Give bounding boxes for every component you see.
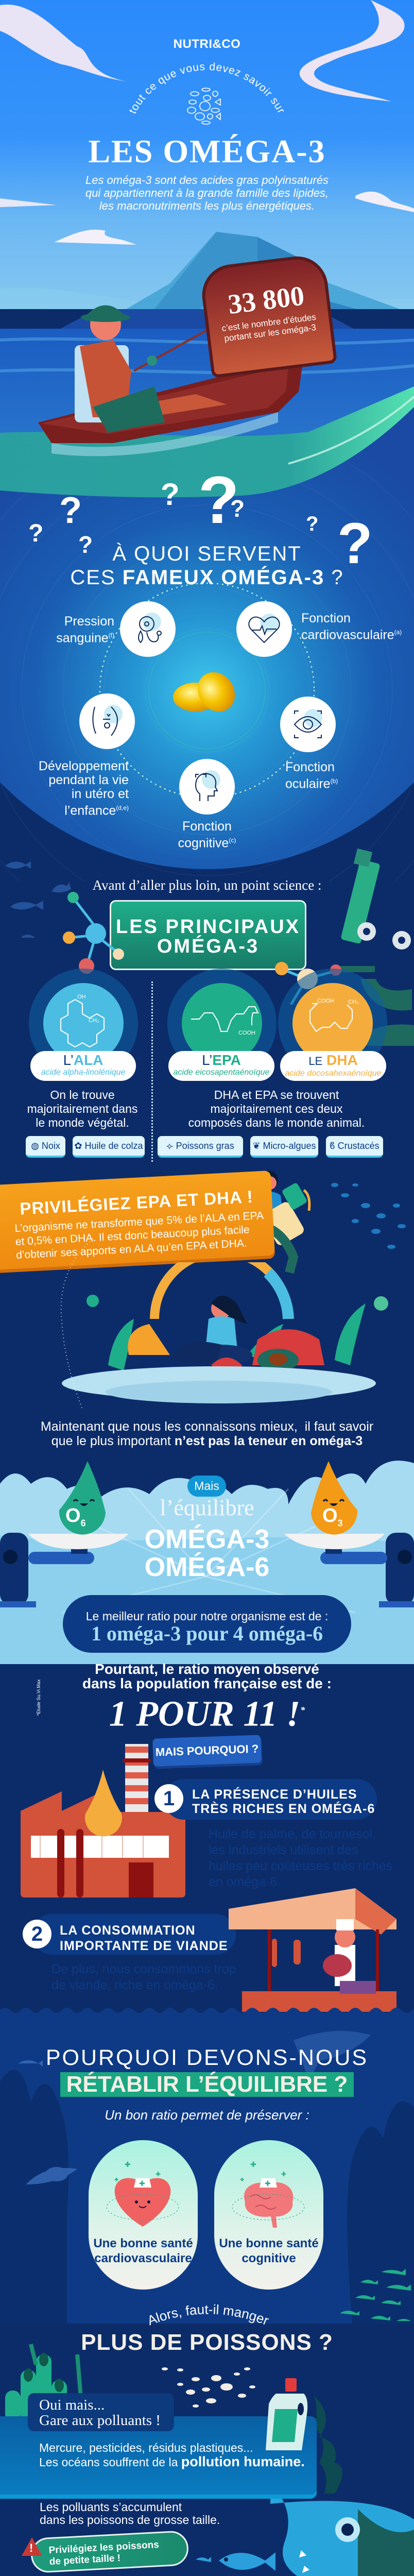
label pill: L'EPA: L’EPA [202,1052,241,1068]
reason 1: huiles riches en oméga-6: Huile de palme, de tournesol, [209,1827,376,1841]
heading: pourquoi devons-nous rétablir l'équilibre [0,2046,414,2097]
tag: noix: ◍ Noix [31,1141,60,1151]
icon: omega-3 drop: O3 [322,1505,343,1529]
tags: food sources [26,1136,383,1158]
icon: heart with nurse cap: ✚ [156,2171,161,2178]
illustration: man pouring oil [266,1171,311,1274]
tag: micro-algues [250,1136,318,1158]
benefit: fonction oculaire: Fonction [285,760,335,774]
icon: brain with nurse cap: ✚ [281,2171,286,2178]
benefit: développement in utero: in utéro et [72,787,129,801]
benefit: fonction cardiovasculaire: cardiovasculaire(a) [301,628,402,642]
text: polluants s'accumulent [40,2501,220,2527]
intro text: qui appartiennent à la grande famille des lipides, [85,187,329,199]
tag: huile de colza [73,1136,145,1158]
background: clouds [0,0,414,245]
benefit: fonction oculaire [280,697,338,791]
title: LES OMÉGA-3: LES OMÉGA-3 [88,133,326,170]
label pill: LE DHA: acide docosahexaénoïque [285,1069,381,1078]
icon: omega-3 capsules [173,672,235,712]
tag: huile de colza: ✿ Huile de colza [74,1141,143,1151]
text: ALA sources [27,1088,137,1129]
sign: 33 800 studies: c’est le nombre d’études [221,312,317,333]
background: dark ocean for pollution section [0,2321,414,2576]
heading: l'équilibre oméga-3 oméga-6: OMÉGA-3 [145,1524,269,1554]
background: clouds panel [0,1461,414,1664]
tab: oui mais gare aux polluants: Gare aux polluants ! [39,2412,161,2429]
icon: omega-3 drop [311,1461,357,1535]
benefit: développement in utero: pendant la vie [48,773,129,787]
label pill: LE DHA [280,1051,386,1081]
decoration: fish school right [331,1183,406,1249]
icon: ALA molecule circle: OH [77,994,86,1000]
sign: 33 800 studies: portant sur les oméga-3 [223,323,317,344]
icon: heart with nurse cap: ✚ [139,2179,145,2188]
badge: mais [187,1476,226,1497]
icon: heart pulse [236,601,292,657]
icon: head [179,759,235,815]
reason 2: consommation de viande: 2 [31,1923,43,1945]
badge: mais pourquoi [152,1735,262,1767]
text: polluants s'accumulent: Les polluants s’accumulent [40,2500,182,2514]
benefit: fonction cognitive: cognitive(c) [178,836,236,850]
heading: à quoi servent ces fameux oméga-3: CES FAMEUX OMÉGA-3 ? [70,566,344,589]
panel: best ratio: Le meilleur ratio pour notre organisme est de : [86,1609,328,1623]
callout: privilégiez les petits poissons: Privilégiez les poissons [48,2539,159,2556]
badge: mais pourquoi: MAIS POURQUOI ? [155,1742,259,1758]
icon: heart with nurse cap: ✚ [114,2177,118,2183]
text: pourtant le ratio observé: dans la population française est de : [82,1675,332,1691]
decoration: green fish school [330,2262,414,2329]
card: ALA [29,969,138,1081]
panel: les principaux oméga-3: OMÉGA-3 [157,936,259,957]
text: maintenant que nous les connaissons: que le plus important n’est pas la teneur en oméga-3 [51,1434,363,1448]
tag: micro-algues: ❦ Micro-algues [252,1141,316,1151]
benefit: pression sanguine [56,601,176,657]
reason 2: consommation de viande: De plus, nous consommons trop [51,1962,236,1976]
illustration: boat with fisherman [38,305,303,456]
icon: omega-6 drop [59,1461,106,1535]
arc text: tout ce que vous devez savoir sur: tout ce que vous devez savoir sur [129,62,284,113]
text: en oméga-6. [209,1875,281,1889]
decoration: question marks: ? [78,531,93,558]
callout: privilégiez EPA et DHA: PRIVILÉGIEZ EPA ET DHA ! [20,1187,254,1218]
reason 1: huiles riches en oméga-6: les industriels utilisent des [209,1843,358,1857]
panel: best ratio: 1 oméga-3 pour 4 oméga-6 [91,1622,323,1645]
text: DHA and EPA sources: majoritairement ces deux [211,1102,342,1115]
panel: gare aux polluants: Mercure, pesticides, résidus plastiques... [39,2441,253,2454]
icon: ALA molecule circle [43,983,124,1063]
icon: stethoscope drop [120,601,176,657]
reason 1: huiles riches en oméga-6: LA PRÉSENCE D’HUILES [192,1787,357,1802]
text: polluants s'accumulent: dans les poissons de grosse taille. [40,2513,220,2527]
heading: l'équilibre oméga-3 oméga-6: OMÉGA-6 [145,1552,269,1582]
benefit: développement in utero [39,693,135,818]
text: DHA and EPA sources: composés dans le monde animal. [188,1116,365,1129]
text: ALA sources: majoritairement dans [27,1102,137,1115]
reason 2: consommation de viande: LA CONSOMMATION [60,1923,196,1938]
decoration: question marks: ? [230,495,245,522]
card: EPA [167,969,277,1081]
heading: pourquoi devons-nous rétablir l'équilibre: RÉTABLIR L’ÉQUILIBRE ? [66,2072,348,2097]
text: un bon ratio permet: Un bon ratio permet de préserver : [105,2107,309,2123]
benefit: pression sanguine: sanguine(f) [56,631,114,645]
callout: privilégiez EPA et DHA: et 0,5% en DHA. Il est donc beaucoup plus facile [15,1224,250,1248]
background: sky [0,0,414,340]
text: ALA sources: On le trouve [50,1088,115,1101]
text: maintenant que nous les connaissons [41,1419,373,1448]
decoration: white fish school [160,2364,263,2410]
panel: best ratio [63,1595,351,1653]
label pill: LE DHA: LE DHA [308,1052,358,1068]
icon: DHA molecule circle: CH₃ [348,999,358,1005]
card: santé cognitive [214,2140,323,2290]
label pill: L'ALA: L’ALA [63,1052,103,1068]
icon: brain with nurse cap: ✚ [240,2177,244,2183]
panel: gare aux polluants [0,2416,317,2495]
icon: fish ball [187,88,221,125]
text: DHA and EPA sources: DHA et EPA se trouvent [214,1088,339,1101]
label pill: L'EPA [168,1051,274,1081]
heading: plus de poissons: PLUS DE POISSONS ? [81,2330,333,2355]
deep sea & glow circle [0,309,414,881]
heading: l'équilibre oméga-3 oméga-6: l’équilibre [160,1495,254,1520]
panel: les principaux oméga-3 [110,900,306,970]
tag: crustacés [326,1136,383,1158]
illustration: mountains [3,232,400,309]
background: deep navy with wavy top [0,2004,414,2324]
logo: NUTRI&CO: NUTRI&CO [174,37,240,51]
illustration: butcher stall [227,1888,396,2012]
illustration: fish chain [193,2499,414,2576]
reason 2: consommation de viande [23,1914,236,1992]
icon: EPA molecule circle [182,983,262,1063]
background gradient lower section [0,1162,414,1492]
benefit: fonction oculaire: oculaire(b) [285,776,338,791]
callout: privilégiez EPA et DHA: d’obtenir ses apports en ALA qu’en EPA et DHA. [16,1238,247,1261]
note: etude su.vi.max: *Etude Su.Vi.Max [36,1680,41,1716]
illustration: microscope [340,848,414,1046]
tag: crustacés: ϐ Crustacés [330,1141,380,1151]
callout: privilégiez les petits poissons: ! [29,2541,33,2554]
benefit: développement in utero: l’enfance(d,e) [64,803,129,818]
benefit: fonction cardiovasculaire [236,601,402,657]
heading: à quoi servent ces fameux oméga-3 [70,543,344,589]
decoration: question marks: ? [59,490,82,531]
dotted ring connecting benefits [99,582,315,794]
icon: brain with nurse cap: ✚ [265,2179,271,2188]
icon: ALA molecule circle: CH₃ [89,1018,99,1024]
tab: oui mais gare aux polluants: Oui mais... [39,2397,105,2413]
illustration: coral [0,2334,98,2421]
illustration: factory with oil drop [21,1744,185,1897]
decoration: question marks: ? [161,477,180,512]
icon: eye [280,697,336,752]
benefit: pression sanguine: Pression [64,614,114,629]
text: ALA sources: le monde végétal. [36,1116,129,1129]
icon: heart with nurse cap [104,2161,181,2233]
decoration: question marks: ? [198,462,239,537]
reason 1: huiles riches en oméga-6: huiles peu coûteuses très riches [209,1859,392,1873]
illustration: detergent bottle [262,2378,308,2450]
reason 1: huiles riches en oméga-6: 1 [163,1787,175,1810]
reason 2: consommation de viande: de viande, riche en oméga-6. [51,1978,218,1992]
icon: EPA molecule circle: COOH [238,1030,255,1036]
sign: 33 800 studies: 33 800 [226,280,306,320]
label pill: L'EPA: acide eicosapentaénoïque [174,1068,269,1077]
card: santé cardiovasculaire [89,2140,198,2290]
card: DHA [278,969,387,1081]
intro text: les macronutriments les plus énergétiques. [99,199,315,212]
heading: l'équilibre oméga-3 oméga-6 [145,1495,269,1582]
decoration: question marks: ? [337,511,372,575]
text: maintenant que nous les connaissons: Maintenant que nous les connaissons mieux, il faut savoir [41,1419,373,1434]
icon: omega-6 drop: O6 [65,1505,86,1529]
card: santé cardiovasculaire: Une bonne santé [93,2236,193,2250]
text: avant d'aller plus loin: Avant d’aller plus loin, un point science : [93,877,321,893]
callout: privilégiez les petits poissons [21,2532,191,2572]
icon: brain with nurse cap [230,2161,307,2233]
dotted divider [151,981,153,1162]
callout: privilégiez les petits poissons: de petite taille ! [49,2553,121,2567]
label pill: L'ALA [30,1051,136,1081]
decoration: question marks: ? [306,513,318,535]
benefit: développement in utero: Développement [39,759,129,773]
label pill: L'ALA: acide alpha-linolénique [41,1068,125,1077]
decoration: seaweed right [304,2391,355,2494]
tab: oui mais gare aux polluants [28,2393,174,2431]
benefit: fonction cardiovasculaire: Fonction [301,611,351,625]
reason 1: huiles riches en oméga-6 [154,1779,392,1889]
reason 2: consommation de viande: IMPORTANTE DE VIANDE [60,1939,228,1953]
illustration: meditating woman & food plate [62,1262,388,1403]
badge: mais: Mais [194,1479,219,1493]
intro text: Les oméga-3 sont des acides gras polyinsaturés [85,174,329,187]
icon: pregnancy [79,693,135,749]
big number: 1 pour 11: 1 POUR 11 !* [109,1694,305,1734]
arc text: alors faut-il manger: Alors, faut-il manger [149,2304,269,2326]
heading: à quoi servent ces fameux oméga-3: À QUOI SERVENT [112,543,302,565]
reason 1: huiles riches en oméga-6: TRÈS RICHES EN OMÉGA-6 [192,1802,375,1816]
callout: privilégiez EPA et DHA [0,1171,275,1270]
card: santé cognitive: Une bonne santé [219,2236,319,2250]
benefit: fonction cognitive: Fonction [182,819,232,834]
panel: les principaux oméga-3: LES PRINCIPAUX [116,916,300,938]
icon: warning [22,2537,42,2556]
panel: gare aux polluants: Les océans souffrent de la pollution humaine. [39,2454,305,2469]
benefit: fonction cognitive [178,759,236,850]
decoration: question marks [28,462,372,575]
illustration: balance scale [0,1533,414,1607]
card: santé cognitive: cognitive [242,2251,296,2265]
heading: pourquoi devons-nous rétablir l'équilibre: POURQUOI DEVONS-NOUS [46,2045,368,2070]
tag: poissons gras: ⟣ Poissons gras [166,1141,234,1151]
tag: noix [26,1136,65,1158]
text: pourtant le ratio observé: Pourtant, le ratio moyen observé [95,1661,319,1677]
sign: 33 800 studies [199,253,337,378]
icon: DHA molecule circle [292,983,373,1063]
callout: privilégiez EPA et DHA: L’organisme ne transforme que 5% de l’ALA en EPA [14,1210,264,1234]
dotted curve [61,1239,93,1408]
decoration: fish silhouettes [5,861,71,938]
decoration: question marks: ? [28,520,43,547]
card: santé cardiovasculaire: cardiovasculaire [94,2251,192,2265]
decoration: molecules [63,892,341,1005]
icon: DHA molecule circle: COOH [317,998,334,1004]
intro text [85,174,329,212]
text: pourtant le ratio observé [82,1661,332,1691]
tag: poissons gras [158,1136,243,1158]
text: DHA and EPA sources [188,1088,365,1129]
